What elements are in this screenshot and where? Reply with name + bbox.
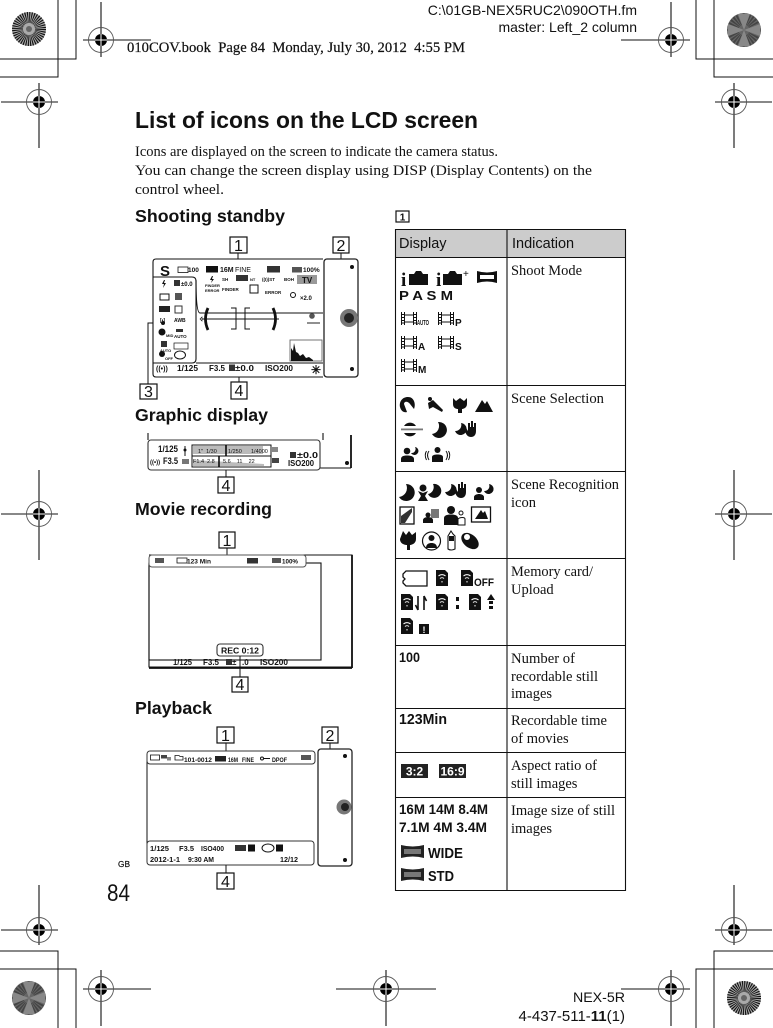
viewfinder frame: [200, 308, 279, 330]
icons: scene selection: [400, 397, 493, 462]
diagram: shooting standby: [140, 237, 358, 401]
panel 4: bottom band readouts: ✳: [311, 363, 321, 377]
header labels: Indication: [512, 236, 574, 252]
callout 4: [231, 377, 247, 400]
histogram: [290, 340, 322, 361]
icons: scene recognition: [399, 482, 494, 552]
panel 4: bottom band readouts: F3.5: [209, 363, 225, 373]
movie status band: [149, 555, 306, 567]
indication column text: Aspect ratio of: [511, 758, 597, 774]
playback readout band: F3.5: [179, 844, 194, 853]
indication column text: Scene Recognition: [511, 477, 620, 493]
playback status band: [147, 751, 315, 764]
recording indicator: REC 0:12: [221, 646, 259, 656]
callout 1: 1: [234, 238, 243, 255]
panel 3: left icon column: AUTO: [160, 348, 171, 353]
icons: shoot modes: M: [418, 365, 426, 376]
playback status band: 16M: [228, 757, 238, 764]
shutter and aperture scale: 5.6 11 22: [223, 459, 255, 465]
header: file path: C:\01GB-NEX5RUC2\090OTH.fm: [428, 2, 637, 18]
indication column text: [511, 263, 620, 837]
playback readout band: [147, 841, 314, 865]
registration star: bottom right: [727, 981, 761, 1015]
movie readouts: ISO200: [260, 658, 289, 667]
icons: shoot modes: P: [455, 318, 462, 329]
playback status band: DPOF: [272, 757, 287, 764]
callout 4: 4: [221, 874, 230, 891]
callout 3: 3: [144, 384, 153, 401]
callout 4: [217, 865, 234, 891]
panel 3: left icon column: AUTO: [174, 334, 187, 339]
icons: shoot modes: i: [401, 270, 406, 291]
movie readouts: 1/125: [173, 658, 193, 667]
diagram: graphic display: [148, 433, 351, 495]
graphic readouts: 1/125: [158, 444, 178, 454]
playback readout band: 12/12: [280, 855, 298, 864]
callout 2: 2: [337, 238, 346, 255]
header: master page: master: Left_2 column: [498, 19, 637, 35]
registration star: top left: [12, 12, 46, 46]
panel 3: left icon column: ±0.0: [181, 282, 193, 288]
intro text: control wheel.: [135, 182, 224, 198]
callout 2: [333, 237, 349, 259]
intro text: [135, 144, 592, 198]
panel 1: top band text: S: [160, 263, 170, 280]
playback status band: FINE: [242, 757, 255, 764]
callout 1: 1: [223, 533, 232, 550]
footer: model: NEX-5R: [573, 990, 625, 1006]
callout 1: 1: [221, 728, 230, 745]
graphic readouts: [150, 444, 318, 468]
header labels: [399, 236, 574, 252]
indication column text: Upload: [511, 582, 554, 598]
display column text values: 123Min: [399, 712, 447, 728]
table header: [396, 230, 626, 258]
diagram: playback: [147, 727, 352, 891]
page number: GB: [118, 859, 130, 869]
display column text values: 3:2: [406, 764, 423, 778]
indication column text: of movies: [511, 731, 569, 747]
icons: shoot modes: [399, 269, 497, 376]
indication column text: Shoot Mode: [511, 263, 582, 279]
frame lines: [149, 555, 352, 668]
indication column text: still images: [511, 776, 578, 792]
playback readout band: 9:30 AM: [188, 855, 214, 864]
icons: shoot modes: S: [455, 342, 462, 353]
panel 1: top band text: FINDER: [205, 283, 220, 288]
callout 2: [322, 727, 338, 749]
panel 1: top band text: 100%: [303, 267, 320, 274]
panel 1: top band text: FINDER: [222, 287, 240, 292]
display column text values: STD: [428, 868, 454, 885]
shutter and aperture scale: 1" 1/30: [198, 449, 217, 455]
heading: playback: Playback: [135, 698, 212, 718]
icon table: [396, 230, 626, 890]
graphic readouts: F3.5: [163, 456, 178, 466]
panel 3: left icon column: [158, 280, 193, 361]
table grid: [396, 230, 626, 890]
shutter and aperture scale: 1/250: [228, 449, 242, 455]
registration star: bottom left: [12, 981, 46, 1015]
intro text: Icons are displayed on the screen to indicate the camera status.: [135, 144, 498, 160]
shutter and aperture scale: 1/4000: [251, 449, 268, 455]
panel 1: top band text: TV: [302, 276, 313, 285]
graphic readouts: ISO200: [288, 458, 314, 468]
icons: memory card and upload: OFF: [474, 577, 494, 589]
playback readout band: 2012-1-1: [150, 855, 180, 864]
heading: graphic display: Graphic display: [135, 405, 268, 425]
panel 3: left icon column: AWB: [174, 318, 186, 324]
shooting icon: [307, 313, 320, 323]
indication column text: Memory card/: [511, 564, 594, 580]
heading: movie recording: Movie recording: [135, 499, 272, 519]
panel 2: control wheel: [324, 259, 358, 377]
heading: shooting standby: Shooting standby: [135, 206, 285, 226]
indication column text: icon: [511, 495, 537, 511]
callout 4: 4: [235, 383, 244, 400]
page number: [107, 859, 130, 907]
indication column text: Image size of still: [511, 803, 615, 819]
icons: memory card and upload: [401, 570, 495, 635]
icons: shoot modes: +: [463, 269, 469, 280]
panel 3: left icon column: OFF: [165, 356, 174, 361]
movie status band: 123 Min: [187, 558, 211, 566]
indication column text: images: [511, 821, 552, 837]
indication column text: Recordable time: [511, 713, 607, 729]
callout 1: [230, 237, 247, 259]
table key 1: [396, 211, 409, 224]
callout 1: [219, 532, 235, 556]
table key 1: 1: [400, 212, 406, 224]
playback status band: 101-0012: [184, 757, 212, 764]
shutter and aperture scale: F1.4 2.8: [193, 459, 215, 465]
page number: 84: [107, 880, 130, 907]
indication column text: recordable still: [511, 669, 598, 685]
icons: shoot modes: AUTO: [417, 320, 429, 327]
display column text values: 16:9: [440, 764, 465, 778]
movie readouts: [173, 658, 289, 667]
panel 3: left icon column: [•]: [160, 318, 165, 324]
recording indicator: [217, 644, 263, 656]
panel 1: top band text: SH: [222, 277, 228, 282]
panel 1: top band text: ERROR: [205, 288, 220, 293]
display column text values: 16M 14M 8.4M: [399, 801, 488, 817]
header labels: Display: [399, 236, 447, 252]
panel 3: left icon column: MID: [166, 333, 173, 338]
movie status band: 100%: [282, 558, 298, 566]
movie readouts: .0: [242, 658, 249, 667]
icons: shoot modes: i: [436, 270, 441, 291]
panel 4: bottom band readouts: ±0.0: [235, 363, 254, 373]
icons: memory card and upload: !: [422, 625, 426, 635]
panel 1: top band text: ERROR: [265, 290, 282, 295]
shutter and aperture scale: [192, 445, 271, 467]
display column text values: 100: [399, 649, 420, 665]
frame lines: [148, 433, 351, 468]
display column text values: WIDE: [428, 845, 463, 862]
registration star: top right: [727, 13, 761, 47]
icons: shoot modes: A: [418, 342, 425, 353]
panel 1: top band text: ((I))ST: [262, 277, 275, 282]
diagram: movie recording: [149, 532, 352, 694]
panel 4: bottom band readouts: 1/125: [177, 363, 198, 373]
movie readouts: ±: [232, 658, 237, 667]
panel 4: bottom band readouts: ((•)): [156, 366, 168, 373]
intro text: You can change the screen display using DISP (Display Contents) on the: [135, 163, 592, 179]
panel 1: top band text: 100: [188, 267, 199, 274]
graphic readouts: ((•)): [150, 460, 160, 466]
panel 1: top band text: NT: [250, 277, 256, 282]
title: List of icons on the LCD screen: [135, 107, 478, 133]
panel 2: control wheel: [318, 749, 352, 866]
panel 1: top band text: ×2.0: [300, 296, 313, 302]
panel 1: top band text: FINE: [235, 267, 251, 274]
callout 3: [140, 323, 157, 401]
panel 1: top band text: BOH: [284, 277, 294, 282]
panel 1: top band text: 16M: [220, 267, 234, 274]
playback readout band: ISO400: [201, 844, 224, 853]
indication column text: Scene Selection: [511, 391, 605, 407]
icons: shoot modes: P A S M: [399, 288, 453, 303]
callout 4: 4: [222, 478, 231, 495]
indication column text: images: [511, 686, 552, 702]
panel outlines: [153, 259, 323, 377]
movie readouts: F3.5: [203, 658, 220, 667]
callout 4: 4: [236, 677, 245, 694]
panel 1: top band text: [160, 263, 320, 302]
callout 4: [218, 470, 234, 495]
playback readout band: 1/125: [150, 844, 169, 853]
callout 2: 2: [326, 728, 335, 745]
display column text values: 7.1M 4M 3.4M: [399, 819, 487, 835]
graphic readouts: ±0.0: [297, 450, 318, 460]
panel 4: bottom band readouts: [156, 363, 321, 377]
indication column text: Number of: [511, 651, 575, 667]
panel 4: bottom band readouts: ISO200: [265, 363, 293, 373]
footer: part number: 4-437-511-11(1): [519, 1008, 625, 1025]
display column text values: [399, 649, 488, 885]
callout 4: [232, 656, 248, 694]
header: book info: 010COV.book Page 84 Monday, July 30, 2012 4:55 PM: [127, 40, 465, 56]
callout 1: [217, 727, 234, 751]
graphic panel: [148, 440, 320, 470]
